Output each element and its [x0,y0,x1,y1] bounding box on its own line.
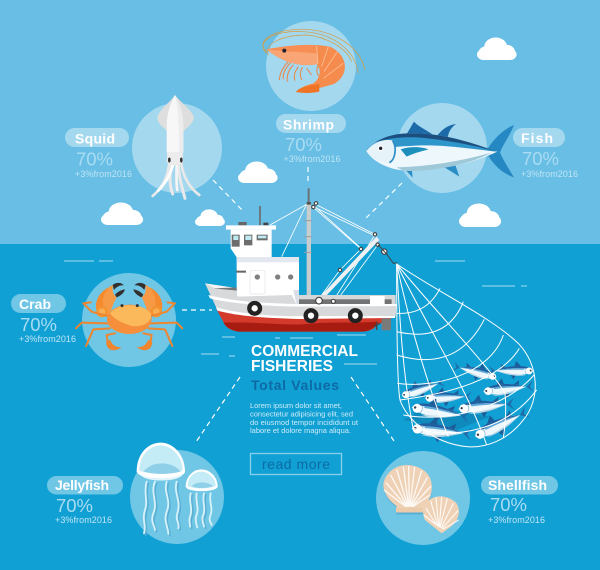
rigging wires [270,203,378,301]
cloud right [459,203,501,227]
icon: squid [153,95,199,198]
label: jellyfish: Jellyfish [55,477,109,493]
shrimp item [263,29,365,164]
label: jellyfish [47,476,123,525]
mast [304,188,312,306]
subheading: Total Values [251,377,339,393]
body text: do eiusmod tempor incididunt ut [250,418,359,427]
background: sky [0,0,600,245]
icon: shells [383,465,459,533]
label: crab: +3%from2016 [19,334,76,344]
pulleys [312,202,387,304]
cabin [226,222,299,305]
button [250,454,342,474]
label: jellyfish: 70% [56,495,93,516]
label: fish [513,128,578,179]
antenna [259,206,261,225]
net with fish [397,264,537,447]
boom [321,237,379,297]
label: shellfish: 70% [490,494,527,515]
label: fish: +3%from2016 [521,169,578,179]
body text: Lorem ipsum dolor sit amet, [250,401,342,410]
label: shellfish: +3%from2016 [488,515,545,525]
crab item [11,283,182,350]
label: crab: Crab [19,296,51,312]
label: fish: Fish [521,130,553,146]
label: shellfish [481,476,558,525]
water lines [64,261,527,364]
cloud small [195,209,225,226]
shellfish item [383,465,558,533]
dashed connectors [182,167,402,444]
circle backdrops [82,21,487,545]
cloud left [101,202,143,225]
icon: crab [76,283,182,350]
label: jellyfish: +3%from2016 [55,515,112,525]
label: crab: 70% [20,314,57,335]
icon: tuna fish [366,122,514,178]
label: shrimp [276,114,346,164]
body text: labore et dolore magna aliqua. [250,426,351,435]
label: squid: 70% [76,148,113,170]
background: sea [0,244,600,570]
label: squid [65,128,132,179]
label: squid: +3%from2016 [75,169,132,179]
button: read more [262,456,330,472]
cloud top right [477,37,517,60]
cloud centre [238,161,278,183]
heading: FISHERIES [251,358,333,375]
label: crab [11,294,76,344]
heading: COMMERCIAL [251,343,358,360]
jellyfish item [47,443,218,536]
label: shellfish: Shellfish [488,477,547,493]
fish item [366,122,578,179]
label: shrimp: Shrimp [283,116,334,132]
icon: shrimp [263,29,365,93]
label: shrimp: +3%from2016 [284,154,340,164]
boat [205,188,397,332]
label: fish: 70% [522,148,559,169]
label: shrimp: 70% [285,134,322,155]
fish school [399,357,534,447]
hull [205,283,397,332]
body text: consectetur adipisicing elit, sed [250,410,353,418]
label: squid: Squid [75,130,115,146]
squid item [65,95,199,198]
net mesh [397,264,537,447]
tyres [249,303,361,321]
heading [251,343,358,375]
icon: jellyfish [137,443,218,536]
body text [250,401,359,435]
